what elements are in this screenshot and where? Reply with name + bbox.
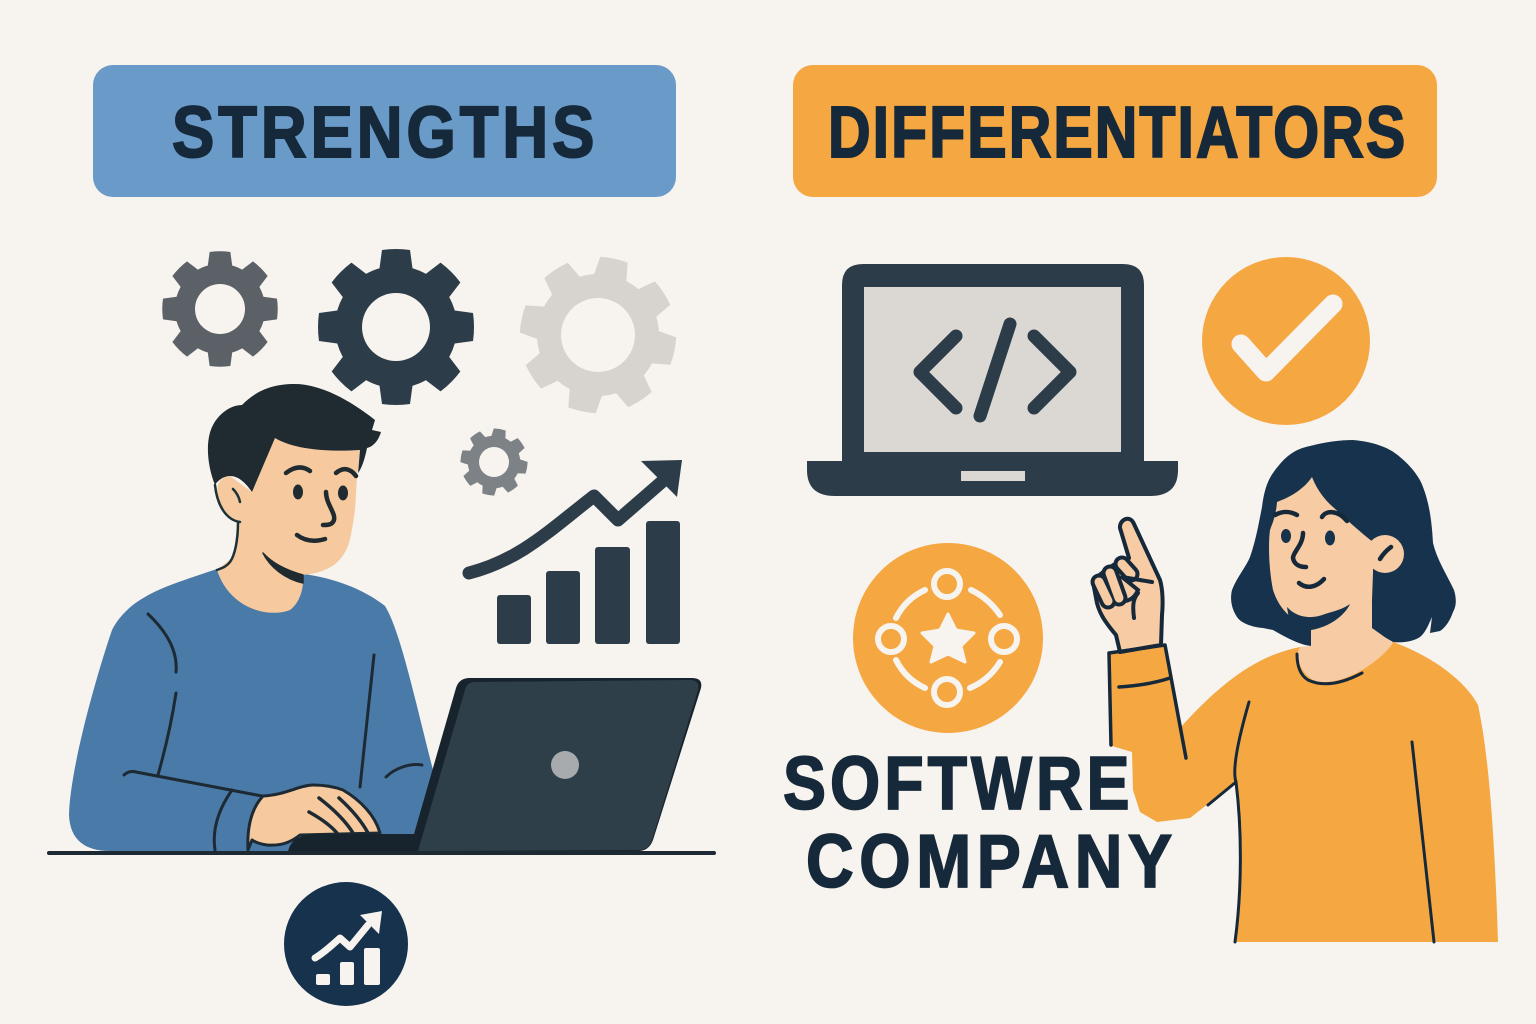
ear and neck outline [215, 485, 240, 570]
sweater lines [1208, 654, 1434, 942]
desk line [47, 851, 716, 855]
icon: check badge [1202, 257, 1370, 425]
sweater [69, 569, 433, 851]
chart: rising bars and arrow [469, 460, 682, 644]
icon: light grey gear [505, 242, 691, 428]
panel: strengths header [93, 65, 676, 197]
text: software company [783, 741, 1172, 903]
panel: differentiators header [793, 65, 1437, 197]
figure: woman pointing [1093, 440, 1498, 942]
sleeve lines [1109, 645, 1186, 758]
hair [1231, 440, 1456, 646]
beard line [263, 553, 303, 583]
icon: small grey gear [162, 251, 278, 367]
icon: star network badge [853, 543, 1043, 733]
icon: large dark gear [318, 249, 474, 405]
face details [1281, 529, 1291, 543]
laptop logo [551, 751, 579, 779]
text: software company: COMPANY [806, 819, 1172, 903]
icon: laptop seen from behind [288, 678, 701, 852]
icon: growth badge [284, 882, 408, 1006]
code symbol [920, 324, 1070, 416]
face [1269, 477, 1373, 628]
ear [1366, 535, 1404, 573]
heading: differentiators: DIFFERENTIATORS [828, 91, 1405, 172]
icon: tiny grey gear [455, 423, 533, 501]
pointing hand [1093, 519, 1163, 652]
face details [293, 484, 303, 500]
figure: man at laptop [69, 384, 433, 851]
sweater lines [124, 614, 422, 850]
text: software company: SOFTWRE [783, 741, 1130, 825]
neck [1297, 600, 1393, 682]
neck and face [217, 438, 360, 613]
ear [217, 476, 252, 522]
heading: strengths: STRENGTHS [172, 93, 594, 173]
icon: code laptop [807, 264, 1178, 496]
sweater [1109, 642, 1498, 942]
hair [208, 384, 381, 492]
hand [248, 785, 380, 850]
jaw shadow [1287, 604, 1350, 630]
